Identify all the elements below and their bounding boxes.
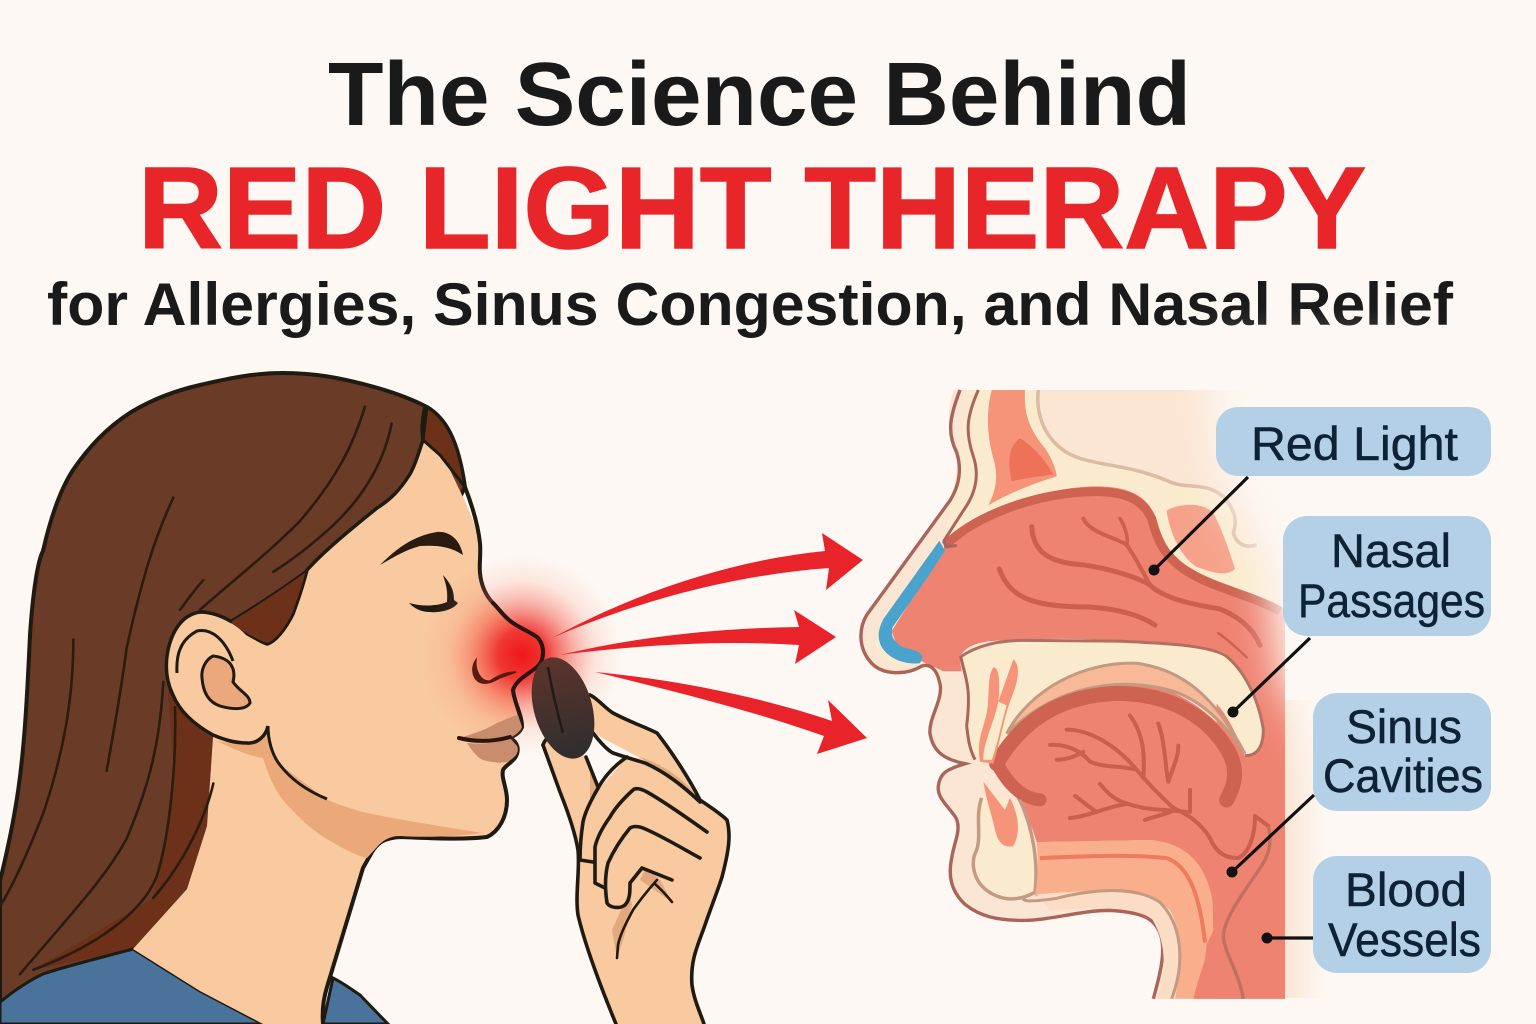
- pointer: red light: [1148, 477, 1248, 576]
- device: [521, 650, 605, 766]
- shirt left: [0, 949, 263, 1024]
- face and neck outline: [323, 487, 543, 1024]
- blue mucosa strip: [879, 541, 945, 663]
- tongue layers: [1035, 840, 1213, 999]
- device groove: [548, 667, 563, 733]
- hand palm: [578, 695, 729, 1024]
- dark arc: [997, 693, 1235, 800]
- title line 1: The Science Behind: [328, 45, 1191, 145]
- forehead hair: [423, 407, 465, 487]
- ear: [166, 612, 268, 743]
- palate cream: [960, 640, 1263, 762]
- hair strands: [0, 407, 392, 974]
- hairline outline: [232, 406, 425, 644]
- label: nasal passages: Nasal: [1331, 524, 1451, 577]
- subtitle: for Allergies, Sinus Congestion, and Nasal Relief: [47, 271, 1454, 338]
- nasal vessels: [999, 519, 1260, 657]
- nostril: [473, 660, 516, 683]
- pointer leader lines: [1148, 477, 1314, 944]
- nasal device and hand: [521, 650, 729, 1024]
- arrow 1: [552, 533, 863, 638]
- frontal sinus: [988, 390, 1057, 505]
- upper incisor: [979, 659, 1018, 764]
- nose outline: [861, 390, 1163, 999]
- neck shadow: [217, 733, 482, 858]
- red light arrows: [552, 533, 867, 754]
- darker hair under layers: [33, 682, 213, 970]
- lower finger: [543, 737, 616, 1024]
- incisor cream center: [983, 701, 1007, 760]
- nasal anatomy cross-section: [861, 350, 1420, 999]
- eyebrow: [380, 532, 463, 565]
- title line 2: RED LIGHT THERAPY: [138, 143, 1366, 273]
- throat pink: [1193, 943, 1243, 999]
- inner ear: [202, 656, 250, 709]
- label: sinus cavities: Cavities: [1323, 749, 1483, 802]
- mouth cavity: [997, 679, 1285, 999]
- label: red light: Red Light: [1251, 417, 1458, 470]
- sinus vessels: [1050, 716, 1268, 858]
- upper lip: [463, 715, 522, 740]
- label: red light: [1216, 407, 1491, 476]
- hair: [0, 373, 465, 1002]
- sphenoid sinus: [1167, 505, 1235, 573]
- tan bone line: [1038, 390, 1257, 546]
- arc tail: [996, 762, 1040, 800]
- lower throat band: [1037, 891, 1179, 999]
- label: sinus cavities: Sinus: [1346, 700, 1462, 753]
- label: blood vessels: Vessels: [1328, 913, 1481, 966]
- head tissue base: [861, 390, 1285, 999]
- pointer: nasal passages: [1228, 638, 1310, 718]
- pointer: sinus cavities: [1226, 795, 1314, 878]
- frontal sinus inner: [1009, 438, 1053, 481]
- pointer: blood vessels: [1262, 932, 1314, 944]
- illustration: woman in profile: [0, 373, 622, 1024]
- face and neck: [133, 440, 543, 1024]
- throat red line: [1040, 856, 1205, 943]
- nose glow: [422, 555, 622, 755]
- label: nasal passages: Passages: [1298, 574, 1485, 627]
- vertical front palate line: [961, 656, 975, 760]
- label: blood vessels: [1313, 856, 1491, 973]
- closed eye: [409, 575, 458, 612]
- hand shading: [590, 757, 697, 958]
- soft palate band: [1007, 663, 1245, 754]
- ear outline: [166, 612, 268, 743]
- lower jaw outline: [973, 798, 1036, 899]
- label: sinus cavities: [1313, 693, 1491, 811]
- chin inner line: [1024, 891, 1180, 999]
- palate outline: [960, 640, 1263, 756]
- title: [47, 45, 1454, 338]
- lower jaw bone: [975, 796, 1036, 898]
- inner nose line: [944, 390, 978, 547]
- throat outline: [1223, 826, 1270, 999]
- nose tip outline over glow: [493, 603, 543, 727]
- jaw line: [268, 726, 327, 799]
- arrow 3: [595, 672, 867, 754]
- nasal cavity: [892, 486, 1285, 685]
- back of throat tissue: [1217, 621, 1285, 999]
- right tissue fade: [1205, 350, 1420, 760]
- ear helix: [177, 631, 233, 673]
- hand outline: [543, 695, 729, 1024]
- nose cartilage cream: [876, 390, 1280, 669]
- cavity top band: [945, 492, 1280, 611]
- top cover above anatomy: [1100, 360, 1420, 390]
- temple hair shadow: [227, 570, 307, 644]
- label: nasal passages: [1283, 516, 1491, 636]
- arrow 2: [560, 610, 836, 664]
- mouth line: [459, 737, 510, 741]
- label: blood vessels: Blood: [1345, 863, 1467, 916]
- shirt right: [323, 978, 388, 1024]
- lower lip: [467, 738, 518, 763]
- lower incisor: [983, 782, 1018, 847]
- right edge fade strip: [1285, 700, 1325, 998]
